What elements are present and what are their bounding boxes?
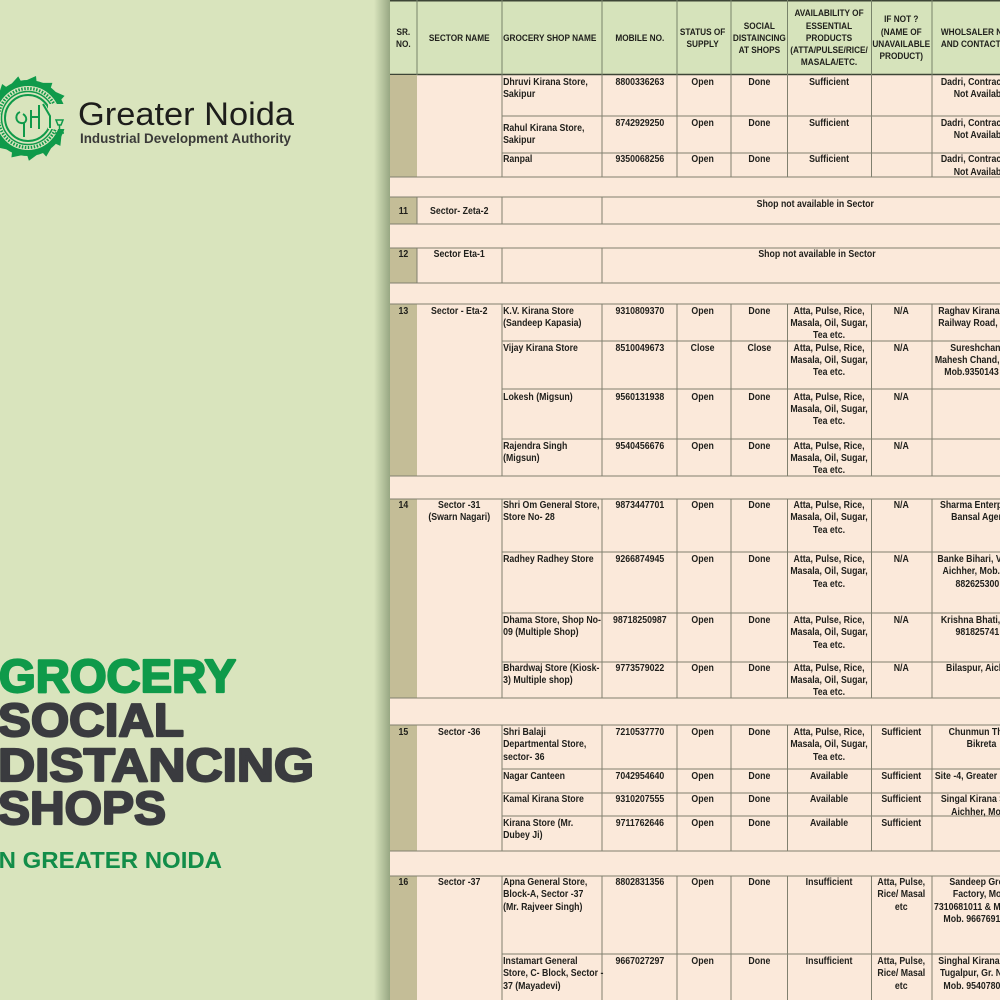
table section: 13 Sector Eta-2: Done [748, 440, 770, 452]
table section: 15 Sector 36: Sufficient [881, 770, 922, 782]
table section: 11 Sector Zeta-2: 11 [399, 205, 409, 217]
table section: 14 Sector 31 Swarn Nagari: Masala, Oil, Sugar, [790, 674, 868, 686]
table header row: AND CONTACT [941, 38, 1000, 49]
table section: Sakipur shops: 8742929250 [615, 117, 664, 129]
table section: 13 Sector Eta-2: Tea etc. [813, 415, 845, 427]
table section: 15 Sector 36: Sufficient [881, 793, 922, 805]
table section: Sakipur shops: Sufficient [809, 76, 850, 88]
table section: 16 Sector 37: 9667027297 [615, 955, 664, 967]
table section: 15 Sector 36: Sufficient [881, 726, 922, 738]
title line: grocery: GROCERY [0, 650, 236, 702]
table section: 14 Sector 31 Swarn Nagari: 14 [398, 499, 409, 511]
table section: 15 Sector 36: sector- 36 [503, 751, 544, 763]
table section: 13 Sector Eta-2: Sector - Eta-2 [431, 305, 487, 317]
table section: 13 Sector Eta-2: Masala, Oil, Sugar, [790, 452, 868, 464]
title line: shops: SHOPS [0, 782, 166, 834]
table section: 15 Sector 36: 15 [398, 726, 409, 738]
table section: 15 Sector 36: 9310207555 [615, 793, 665, 805]
table section: 15 Sector 36: Sector -36 [438, 726, 480, 738]
table section: 14 Sector 31 Swarn Nagari: Store No- 28 [503, 511, 555, 523]
table section: 13 Sector Eta-2: Atta, Pulse, Rice, [793, 440, 865, 452]
table section: 14 Sector 31 Swarn Nagari: Masala, Oil, Sugar, [790, 511, 868, 523]
table section: 16 Sector 37: Atta, Pulse, [877, 955, 925, 967]
table header row: SR. [396, 26, 410, 37]
table section: 15 Sector 36: Atta, Pulse, Rice, [793, 726, 865, 738]
table section: 13 Sector Eta-2: Vijay Kirana Store [503, 342, 578, 354]
logo: Greater Noida Industrial Development Authority [0, 76, 294, 161]
table section: 14 Sector 31 Swarn Nagari: Tea etc. [813, 524, 845, 536]
table section: 13 Sector Eta-2: Open [691, 391, 714, 403]
table section: 16 Sector 37: Apna General Store, [503, 876, 587, 888]
table section: 13 Sector Eta-2: Rajendra Singh [503, 440, 568, 452]
table section: 13 Sector Eta-2: 9310809370 [615, 305, 664, 317]
table section: Sakipur shops: 8800336263 [615, 76, 664, 88]
table section: 14 Sector 31 Swarn Nagari: Tea etc. [813, 686, 845, 698]
table section: 15 Sector 36: Site -4, Greater [935, 770, 997, 782]
table section: 14 Sector 31 Swarn Nagari: Dhama Store, Shop No- [503, 614, 601, 626]
table section: 16 Sector 37: Mob. 9667691 [943, 913, 1000, 925]
table section: Sakipur shops: Open [691, 117, 714, 129]
table section: 16 Sector 37: Block-A, Sector -37 [503, 888, 583, 900]
table section: Sakipur shops [390, 75, 1000, 178]
table section: 13 Sector Eta-2: Masala, Oil, Sugar, [790, 354, 868, 366]
table section: 15 Sector 36: 7210537770 [615, 726, 664, 738]
table section: 13 Sector Eta-2: Atta, Pulse, Rice, [793, 305, 865, 317]
table section: 14 Sector 31 Swarn Nagari: Done [748, 614, 770, 626]
table header row: MOBILE NO. [615, 32, 664, 43]
table section: 15 Sector 36 [390, 725, 1000, 851]
table section: 13 Sector Eta-2: K.V. Kirana Store [503, 305, 574, 317]
table section: 16 Sector 37: Open [691, 876, 714, 888]
logo wordmark: Greater Noida [78, 96, 294, 132]
table section: 16 Sector 37: Rice/ Masal [877, 888, 925, 900]
table section: 14 Sector 31 Swarn Nagari: 981825741 [955, 626, 1000, 638]
table section: 14 Sector 31 Swarn Nagari: 3) Multiple shop) [503, 674, 573, 686]
table section: 12 Sector Eta-1 [390, 248, 1000, 283]
table section: 13 Sector Eta-2: Done [748, 391, 770, 403]
table header row: STATUS OF [680, 26, 726, 37]
table section: 15 Sector 36: Departmental Store, [503, 738, 586, 750]
table section: Sakipur shops: Sakipur [503, 88, 536, 100]
table section: 13 Sector Eta-2: Mob.9350143 [944, 366, 999, 378]
table section: 16 Sector 37: Done [748, 876, 770, 888]
table header row: PRODUCTS [806, 32, 852, 43]
table section: 14 Sector 31 Swarn Nagari: N/A [894, 662, 909, 674]
table header row: UNAVAILABLE [872, 38, 930, 49]
table section: Sakipur shops: Dhruvi Kirana Store, [503, 76, 588, 88]
table section: 14 Sector 31 Swarn Nagari: Krishna Bhati, [941, 614, 1000, 626]
icon: green saw-gear emblem [0, 76, 78, 161]
table section: 15 Sector 36: Available [810, 817, 848, 829]
table section: 16 Sector 37 [390, 876, 1000, 1000]
table section: 14 Sector 31 Swarn Nagari: Bhardwaj Store (Kiosk- [503, 662, 599, 674]
table section: 13 Sector Eta-2: Done [748, 305, 770, 317]
table section: 16 Sector 37: 8802831356 [615, 876, 664, 888]
table shadow [374, 0, 391, 1000]
table section: Sakipur shops: 9350068256 [615, 153, 664, 165]
table section: 13 Sector Eta-2: Open [691, 440, 714, 452]
table section: 13 Sector Eta-2: N/A [894, 305, 909, 317]
table section: 16 Sector 37: etc [895, 901, 908, 913]
table section: 15 Sector 36: Kirana Store (Mr. [503, 817, 573, 829]
table section: 15 Sector 36: Kamal Kirana Store [503, 793, 584, 805]
table section: 14 Sector 31 Swarn Nagari: Masala, Oil, Sugar, [790, 565, 868, 577]
table section: 14 Sector 31 Swarn Nagari: Atta, Pulse, Rice, [793, 614, 865, 626]
table section: 13 Sector Eta-2 [390, 304, 1000, 476]
table section: 14 Sector 31 Swarn Nagari: Atta, Pulse, Rice, [793, 499, 865, 511]
table section: 15 Sector 36: Sufficient [881, 817, 922, 829]
table section: 15 Sector 36: 7042954640 [615, 770, 664, 782]
table section: 15 Sector 36: Available [810, 793, 848, 805]
table section: Sakipur shops: Sufficient [809, 117, 850, 129]
table section: Sakipur shops: Ranpal [503, 153, 532, 165]
table section: 13 Sector Eta-2: 8510049673 [615, 342, 664, 354]
table section: 14 Sector 31 Swarn Nagari: N/A [894, 614, 909, 626]
table section: 14 Sector 31 Swarn Nagari: 98718250987 [613, 614, 667, 626]
table header row: (NAME OF [881, 26, 922, 37]
table header row: GROCERY SHOP NAME [503, 32, 596, 43]
table section: 15 Sector 36: Open [691, 770, 714, 782]
table section: 15 Sector 36: Tea etc. [813, 751, 845, 763]
table section: 14 Sector 31 Swarn Nagari: Done [748, 553, 770, 565]
table header row: MASALA/ETC. [801, 56, 857, 67]
table section: 15 Sector 36: Available [810, 770, 848, 782]
table section: 14 Sector 31 Swarn Nagari: 9873447701 [615, 499, 665, 511]
logo subtitle: Industrial Development Authority [80, 130, 291, 146]
table section: 14 Sector 31 Swarn Nagari: Tea etc. [813, 639, 845, 651]
table section: Sakipur shops: Open [691, 153, 714, 165]
table section: 16 Sector 37: (Mr. Rajveer Singh) [503, 901, 582, 913]
table section: Sakipur shops: Done [748, 153, 770, 165]
table section: 16 Sector 37: Sector -37 [438, 876, 480, 888]
table section: Sakipur shops: Sakipur [503, 134, 536, 146]
table section: 15 Sector 36: Done [748, 817, 770, 829]
table section: Sakipur shops: Done [748, 117, 770, 129]
table header row: (ATTA/PULSE/RICE/ [790, 44, 868, 55]
table section: 16 Sector 37: 16 [398, 876, 408, 888]
table header row: SOCIAL [744, 20, 775, 31]
table section: 14 Sector 31 Swarn Nagari: Banke Bihari, V [937, 553, 1000, 565]
table section: 15 Sector 36: Dubey Ji) [503, 829, 543, 841]
table section: 14 Sector 31 Swarn Nagari: Shri Om General Store, [503, 499, 600, 511]
table header row: IF NOT ? [884, 13, 918, 24]
panel: grocery shop table [390, 0, 1000, 1000]
table section: 15 Sector 36: Nagar Canteen [503, 770, 565, 782]
table section: 14 Sector 31 Swarn Nagari: Open [691, 553, 714, 565]
table section: 14 Sector 31 Swarn Nagari: Open [691, 499, 714, 511]
table section: 14 Sector 31 Swarn Nagari: Open [691, 662, 714, 674]
table section: 16 Sector 37: Atta, Pulse, [877, 876, 925, 888]
table section: 13 Sector Eta-2: Atta, Pulse, Rice, [793, 391, 865, 403]
table section: 16 Sector 37: Rice/ Masal [877, 967, 925, 979]
table section: 14 Sector 31 Swarn Nagari: Radhey Radhey Store [503, 553, 594, 565]
table section: 13 Sector Eta-2: 13 [398, 305, 408, 317]
table section: 16 Sector 37: 7310681011 & M [934, 901, 1000, 913]
title line: social: SOCIAL [0, 694, 184, 746]
table header row: NO. [396, 38, 411, 49]
table section: 13 Sector Eta-2: Masala, Oil, Sugar, [790, 317, 868, 329]
table section: 13 Sector Eta-2: Tea etc. [813, 329, 845, 341]
table section: 16 Sector 37: 37 (Mayadevi) [503, 980, 561, 992]
table section: 16 Sector 37: Insufficient [806, 876, 853, 888]
table section: 12 Sector Eta-1: 12 [398, 248, 408, 260]
table section: 14 Sector 31 Swarn Nagari: Atta, Pulse, Rice, [793, 662, 865, 674]
table section: 13 Sector Eta-2: N/A [894, 391, 909, 403]
table section: 13 Sector Eta-2: Lokesh (Migsun) [503, 391, 573, 403]
table section: 13 Sector Eta-2: Tea etc. [813, 464, 845, 476]
table section: 13 Sector Eta-2: Tea etc. [813, 366, 845, 378]
table section: 14 Sector 31 Swarn Nagari: Masala, Oil, Sugar, [790, 626, 868, 638]
table section: Sakipur shops: Rahul Kirana Store, [503, 122, 584, 134]
table section: 14 Sector 31 Swarn Nagari: Open [691, 614, 714, 626]
table section: 16 Sector 37: etc [895, 980, 908, 992]
table section: 14 Sector 31 Swarn Nagari: (Swarn Nagari) [428, 511, 490, 523]
table section: 13 Sector Eta-2: Atta, Pulse, Rice, [793, 342, 865, 354]
table section: 13 Sector Eta-2: N/A [894, 342, 909, 354]
table section: 14 Sector 31 Swarn Nagari: Aichher, Mob. [943, 565, 1000, 577]
table section: 13 Sector Eta-2: N/A [894, 440, 909, 452]
table section: 16 Sector 37: Factory, Mo [953, 888, 1000, 900]
table section: 14 Sector 31 Swarn Nagari: Atta, Pulse, Rice, [793, 553, 865, 565]
table section: 14 Sector 31 Swarn Nagari [390, 499, 1000, 698]
table header row [390, 0, 1000, 75]
table section: Sakipur shops: Sufficient [809, 153, 850, 165]
table header row: AVAILABILITY OF [794, 7, 864, 18]
table section: 15 Sector 36: Done [748, 770, 770, 782]
table section: 13 Sector Eta-2: 9540456676 [615, 440, 664, 452]
table header row: DISTAINCING [733, 32, 786, 43]
table section: 13 Sector Eta-2: Masala, Oil, Sugar, [790, 403, 868, 415]
table section: 14 Sector 31 Swarn Nagari: Sector -31 [438, 499, 481, 511]
table section: Sakipur shops: Open [691, 76, 714, 88]
table section: 11 Sector Zeta-2: Sector- Zeta-2 [430, 205, 488, 217]
table header row: SECTOR NAME [429, 32, 490, 43]
table header row: AT SHOPS [739, 44, 780, 55]
title line: distancing: DISTANCING [0, 739, 314, 791]
table section: 14 Sector 31 Swarn Nagari: N/A [894, 499, 909, 511]
table section: 15 Sector 36: 9711762646 [616, 817, 664, 829]
table section: 13 Sector Eta-2: Close [747, 342, 771, 354]
table section: 14 Sector 31 Swarn Nagari: 882625300 [955, 578, 999, 590]
table section: 13 Sector Eta-2: Open [691, 305, 714, 317]
table section: 15 Sector 36: Open [691, 793, 714, 805]
table section: Sakipur shops: Done [748, 76, 770, 88]
table header row: SUPPLY [687, 38, 719, 49]
table section: 11 Sector Zeta-2: Shop not available in Sector [757, 198, 874, 210]
table section: 15 Sector 36: Masala, Oil, Sugar, [790, 738, 868, 750]
table section: 15 Sector 36: Open [691, 817, 714, 829]
table section: 13 Sector Eta-2: 9560131938 [615, 391, 664, 403]
table section: 14 Sector 31 Swarn Nagari: 09 (Multiple Shop) [503, 626, 579, 638]
table section: 15 Sector 36: Open [691, 726, 714, 738]
table section: 15 Sector 36: Done [748, 726, 770, 738]
table section: 12 Sector Eta-1: Sector Eta-1 [434, 248, 485, 260]
table section: 16 Sector 37: Mob. 9540780 [943, 980, 1000, 992]
table section: 14 Sector 31 Swarn Nagari: Tea etc. [813, 578, 845, 590]
table section: 13 Sector Eta-2: (Sandeep Kapasia) [503, 317, 581, 329]
table section: 16 Sector 37: Open [691, 955, 714, 967]
table section: 15 Sector 36: Done [748, 793, 770, 805]
table header row: ESSENTIAL [806, 20, 853, 31]
table section: 13 Sector Eta-2: (Migsun) [503, 452, 540, 464]
table section: 13 Sector Eta-2: Close [691, 342, 715, 354]
title [0, 650, 314, 834]
table section: 16 Sector 37: Done [748, 955, 770, 967]
table section: 12 Sector Eta-1: Shop not available in Sector [758, 248, 876, 260]
table section: 16 Sector 37: Insufficient [806, 955, 853, 967]
table section: 14 Sector 31 Swarn Nagari: N/A [894, 553, 909, 565]
table section: 14 Sector 31 Swarn Nagari: 9773579022 [615, 662, 664, 674]
table section: 16 Sector 37: Instamart General [503, 955, 578, 967]
table header row: PRODUCT) [880, 50, 923, 61]
table section: 13 Sector Eta-2: Mahesh Chand, [935, 354, 1000, 366]
table section: 15 Sector 36: Bikreta [967, 738, 997, 750]
table section: 15 Sector 36: Shri Balaji [503, 726, 546, 738]
table section: 14 Sector 31 Swarn Nagari: Done [748, 499, 770, 511]
table background [390, 0, 1000, 1000]
table section: 16 Sector 37: Store, C- Block, Sector - [503, 967, 603, 979]
table section: 11 Sector Zeta-2 [390, 197, 1000, 224]
table section: 14 Sector 31 Swarn Nagari: 9266874945 [615, 553, 665, 565]
table section: 14 Sector 31 Swarn Nagari: Done [748, 662, 770, 674]
